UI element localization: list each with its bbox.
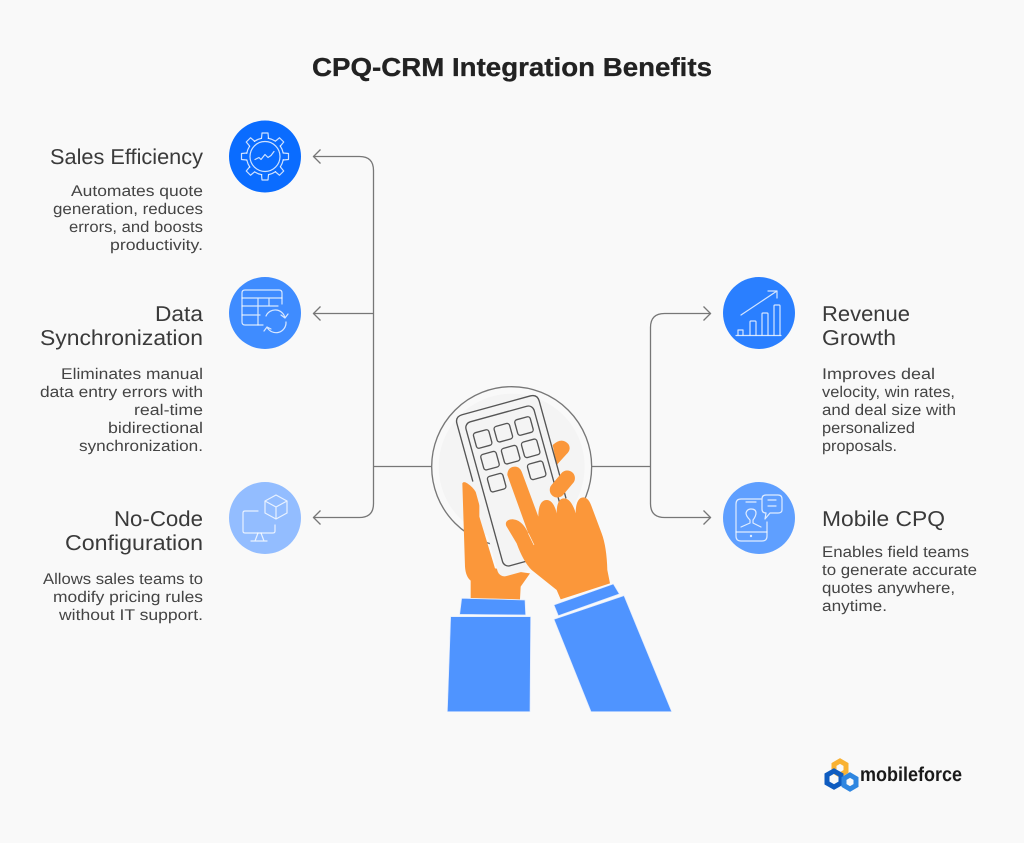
background circle <box>432 387 592 547</box>
right hand <box>506 467 610 599</box>
logo wordmark: mobileforce <box>860 764 962 786</box>
text: no-code description: modify pricing rules <box>53 589 203 606</box>
text: sales efficiency description <box>53 183 203 254</box>
text: mobile cpq description: quotes anywhere, <box>822 580 955 597</box>
text: mobile cpq description: Enables field teams <box>822 544 969 561</box>
text: data synchronization description: Eliminates manual <box>61 366 203 383</box>
heading: sales efficiency: Sales Efficiency <box>50 145 203 169</box>
text: no-code description: Allows sales teams to <box>43 571 203 588</box>
text: data synchronization description: synchronization. <box>79 438 203 455</box>
text: revenue growth description: proposals. <box>822 438 897 455</box>
heading: no-code configuration <box>65 507 203 555</box>
text: revenue growth description <box>822 366 956 455</box>
text: revenue growth description: Improves deal <box>822 366 935 383</box>
text: no-code description: without IT support. <box>58 607 203 624</box>
phone <box>455 394 582 578</box>
right sleeve <box>554 584 672 712</box>
text: revenue growth description: and deal size with <box>822 402 956 419</box>
icon: bar chart with arrow <box>723 277 795 349</box>
title: CPQ-CRM Integration Benefits <box>312 52 712 82</box>
heading: data synchronization <box>40 302 203 350</box>
text: sales efficiency description: errors, and boosts <box>69 219 203 236</box>
text: data synchronization description <box>40 366 203 455</box>
icon: table with sync arrows <box>229 277 301 349</box>
heading: no-code configuration: No-Code <box>114 507 203 531</box>
text: data synchronization description: bidirectional <box>108 420 203 437</box>
text: mobile cpq description: to generate accurate <box>822 562 977 579</box>
heading: data synchronization: Data <box>155 302 203 326</box>
logo mark <box>827 761 856 789</box>
heading: revenue growth <box>822 302 910 350</box>
left hand finger over phone <box>547 467 578 501</box>
text: revenue growth description: personalized <box>822 420 915 437</box>
panel: sales efficiency <box>50 120 301 254</box>
heading: no-code configuration: Configuration <box>65 531 203 555</box>
icon: phone with chat bubble <box>723 482 795 554</box>
text: sales efficiency description: Automates quote <box>71 183 203 200</box>
phone keypad <box>473 416 547 493</box>
central illustration: hands holding phone <box>432 387 672 712</box>
icon: gear with trend line <box>229 120 301 192</box>
panel: no-code configuration <box>43 482 301 624</box>
connector lines and arrows <box>313 150 711 524</box>
panel: mobile cpq <box>723 482 977 615</box>
text: data synchronization description: real-time <box>134 402 203 419</box>
logo: mobileforce <box>827 761 962 789</box>
text: revenue growth description: velocity, win rates, <box>822 384 955 401</box>
heading: data synchronization: Synchronization <box>40 326 203 350</box>
panel: data synchronization <box>40 277 301 455</box>
text: data synchronization description: data entry errors with <box>40 384 203 401</box>
text: sales efficiency description: generation, reduces <box>53 201 203 218</box>
text: mobile cpq description: anytime. <box>822 598 887 615</box>
icon: monitor with cube <box>229 482 301 554</box>
heading: revenue growth: Revenue <box>822 302 910 326</box>
text: mobile cpq description <box>822 544 977 615</box>
panel: revenue growth <box>723 277 956 455</box>
left sleeve <box>447 598 531 712</box>
left hand <box>462 441 570 599</box>
heading: revenue growth: Growth <box>822 326 896 350</box>
text: no-code description <box>43 571 203 624</box>
heading: mobile cpq: Mobile CPQ <box>822 507 945 531</box>
text: sales efficiency description: productivity. <box>110 237 203 254</box>
